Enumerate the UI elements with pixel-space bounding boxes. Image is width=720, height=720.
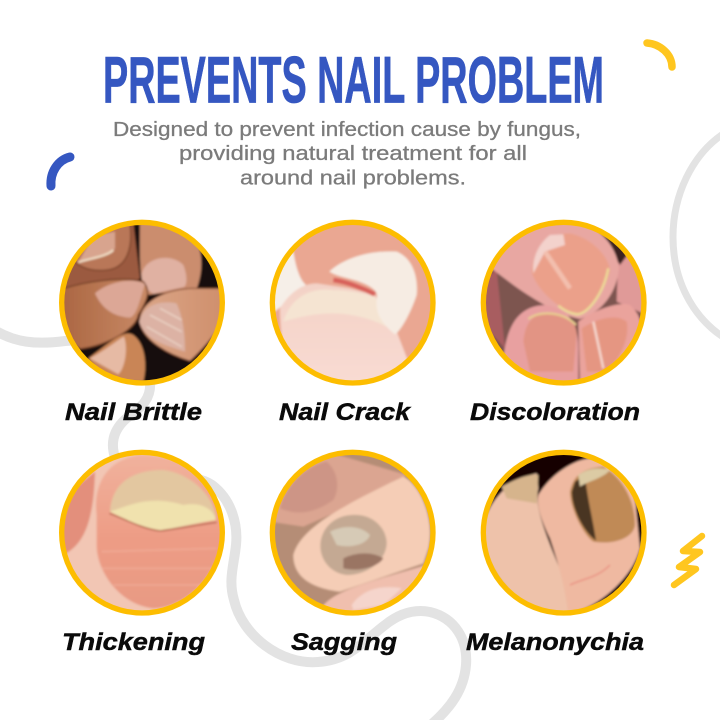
subtitle: providing natural treatment for all [179, 142, 527, 165]
label: Thickening: Thickening [62, 629, 205, 656]
label: Sagging: Sagging [291, 629, 397, 656]
label: Nail Brittle: Nail Brittle [65, 399, 202, 426]
circle border [483, 452, 644, 613]
icon: yellow arc [647, 43, 672, 67]
label: Melanonychia: Melanonychia [466, 629, 644, 656]
panel: sagging photo [267, 448, 440, 618]
subtitle: Designed to prevent infection cause by fungus, [113, 118, 581, 141]
subtitle: around nail problems. [240, 166, 466, 190]
panel: melanonychia photo [477, 448, 650, 618]
circle border [483, 222, 644, 383]
icon: blue arc [51, 157, 70, 186]
label: Nail Crack: Nail Crack [279, 399, 412, 426]
panel: nail brittle photo [53, 218, 230, 388]
decorative curve: right arc [673, 134, 720, 337]
icon: yellow zigzag [674, 536, 702, 585]
panel: nail crack photo [267, 218, 440, 388]
circle border [272, 452, 433, 613]
circle border [272, 222, 433, 383]
subtitle [113, 118, 581, 190]
label: Discoloration: Discoloration [470, 399, 640, 426]
panel: thickening photo [57, 448, 230, 618]
panel: discoloration photo [477, 218, 650, 388]
decorative curve: left wave [0, 331, 466, 720]
circle border [62, 222, 222, 383]
circle border [62, 452, 222, 613]
